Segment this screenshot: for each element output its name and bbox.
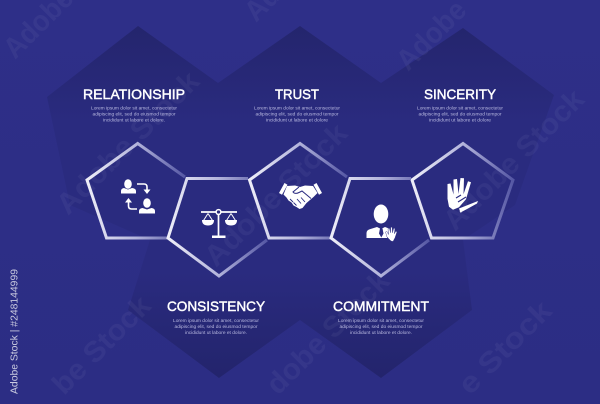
text block: trust: incididunt ut labore et dolore bbox=[266, 118, 329, 122]
text block: consistency: Lorem ipsum dolor sit amet, consectetur bbox=[173, 318, 260, 323]
icon: open hands bbox=[448, 178, 478, 213]
text block: relationship: incididunt ut labore et dolore. bbox=[103, 118, 165, 122]
watermarks: Adobe Stock bbox=[437, 83, 591, 237]
pentagon outline: sincerity bbox=[412, 144, 513, 238]
text block: commitment: adipiscing elit, sed do eiusmod tempor bbox=[340, 324, 423, 329]
text block: relationship bbox=[91, 106, 178, 122]
watermarks: e Stock bbox=[452, 294, 559, 401]
pentagon outline: commitment bbox=[331, 178, 429, 276]
heading: relationship: RELATIONSHIP bbox=[83, 86, 185, 102]
vertical stock credit: Adobe Stock | #248144999 bbox=[8, 269, 20, 394]
text block: trust: Lorem ipsum dolor sit amet, consectetur bbox=[254, 106, 341, 110]
text block: sincerity: Lorem ipsum dolor sit amet, consectetur bbox=[417, 106, 504, 110]
text block: consistency bbox=[173, 318, 260, 335]
text block: trust bbox=[254, 106, 341, 122]
heading: consistency: CONSISTENCY bbox=[167, 298, 266, 314]
text block: sincerity bbox=[417, 106, 504, 122]
watermarks: Adobe Stock bbox=[198, 117, 355, 273]
heading: commitment: COMMITMENT bbox=[333, 298, 429, 314]
text block: sincerity: incididunt ut labore et dolore bbox=[429, 118, 492, 122]
text block: sincerity: adipiscing elit, sed do eiusmod tempor bbox=[418, 112, 502, 116]
text block: commitment: incididunt ut labore et dolore. bbox=[350, 330, 412, 335]
panel: trust bbox=[254, 86, 341, 122]
text block: relationship: Lorem ipsum dolor sit amet, consectetur bbox=[91, 106, 178, 110]
text block: relationship: adipiscing elit, sed do eiusmod tempor bbox=[92, 112, 176, 116]
panel: relationship bbox=[83, 86, 185, 122]
panel: sincerity bbox=[417, 86, 504, 122]
icon: two people with exchange arrows bbox=[121, 179, 155, 214]
icon: businessman with raised hand bbox=[366, 204, 397, 242]
text block: commitment bbox=[338, 318, 425, 335]
watermarks: be Stock bbox=[46, 289, 158, 401]
text block: trust: adipiscing elit, sed do eiusmod tempor bbox=[256, 112, 339, 116]
pentagon outline: consistency bbox=[168, 178, 267, 276]
icon: handshake bbox=[279, 183, 322, 209]
text block: consistency: adipiscing elit, sed do eiusmod tempor bbox=[174, 324, 258, 329]
panel: commitment bbox=[333, 298, 429, 335]
icon: balance scales bbox=[201, 210, 237, 238]
text block: commitment: Lorem ipsum dolor sit amet, consectetur bbox=[338, 318, 425, 323]
watermarks: Adobe Stock bbox=[50, 65, 207, 221]
text block: consistency: incididunt ut labore et dolore. bbox=[185, 330, 247, 335]
heading: trust: TRUST bbox=[275, 86, 319, 102]
pentagon outline: trust bbox=[250, 144, 347, 238]
panel: consistency bbox=[167, 298, 266, 335]
heading: sincerity: SINCERITY bbox=[424, 86, 497, 102]
dark pentagon backdrop bbox=[47, 26, 554, 378]
watermarks: dobe Stock bbox=[260, 265, 397, 401]
pentagon outline: relationship bbox=[87, 144, 185, 238]
